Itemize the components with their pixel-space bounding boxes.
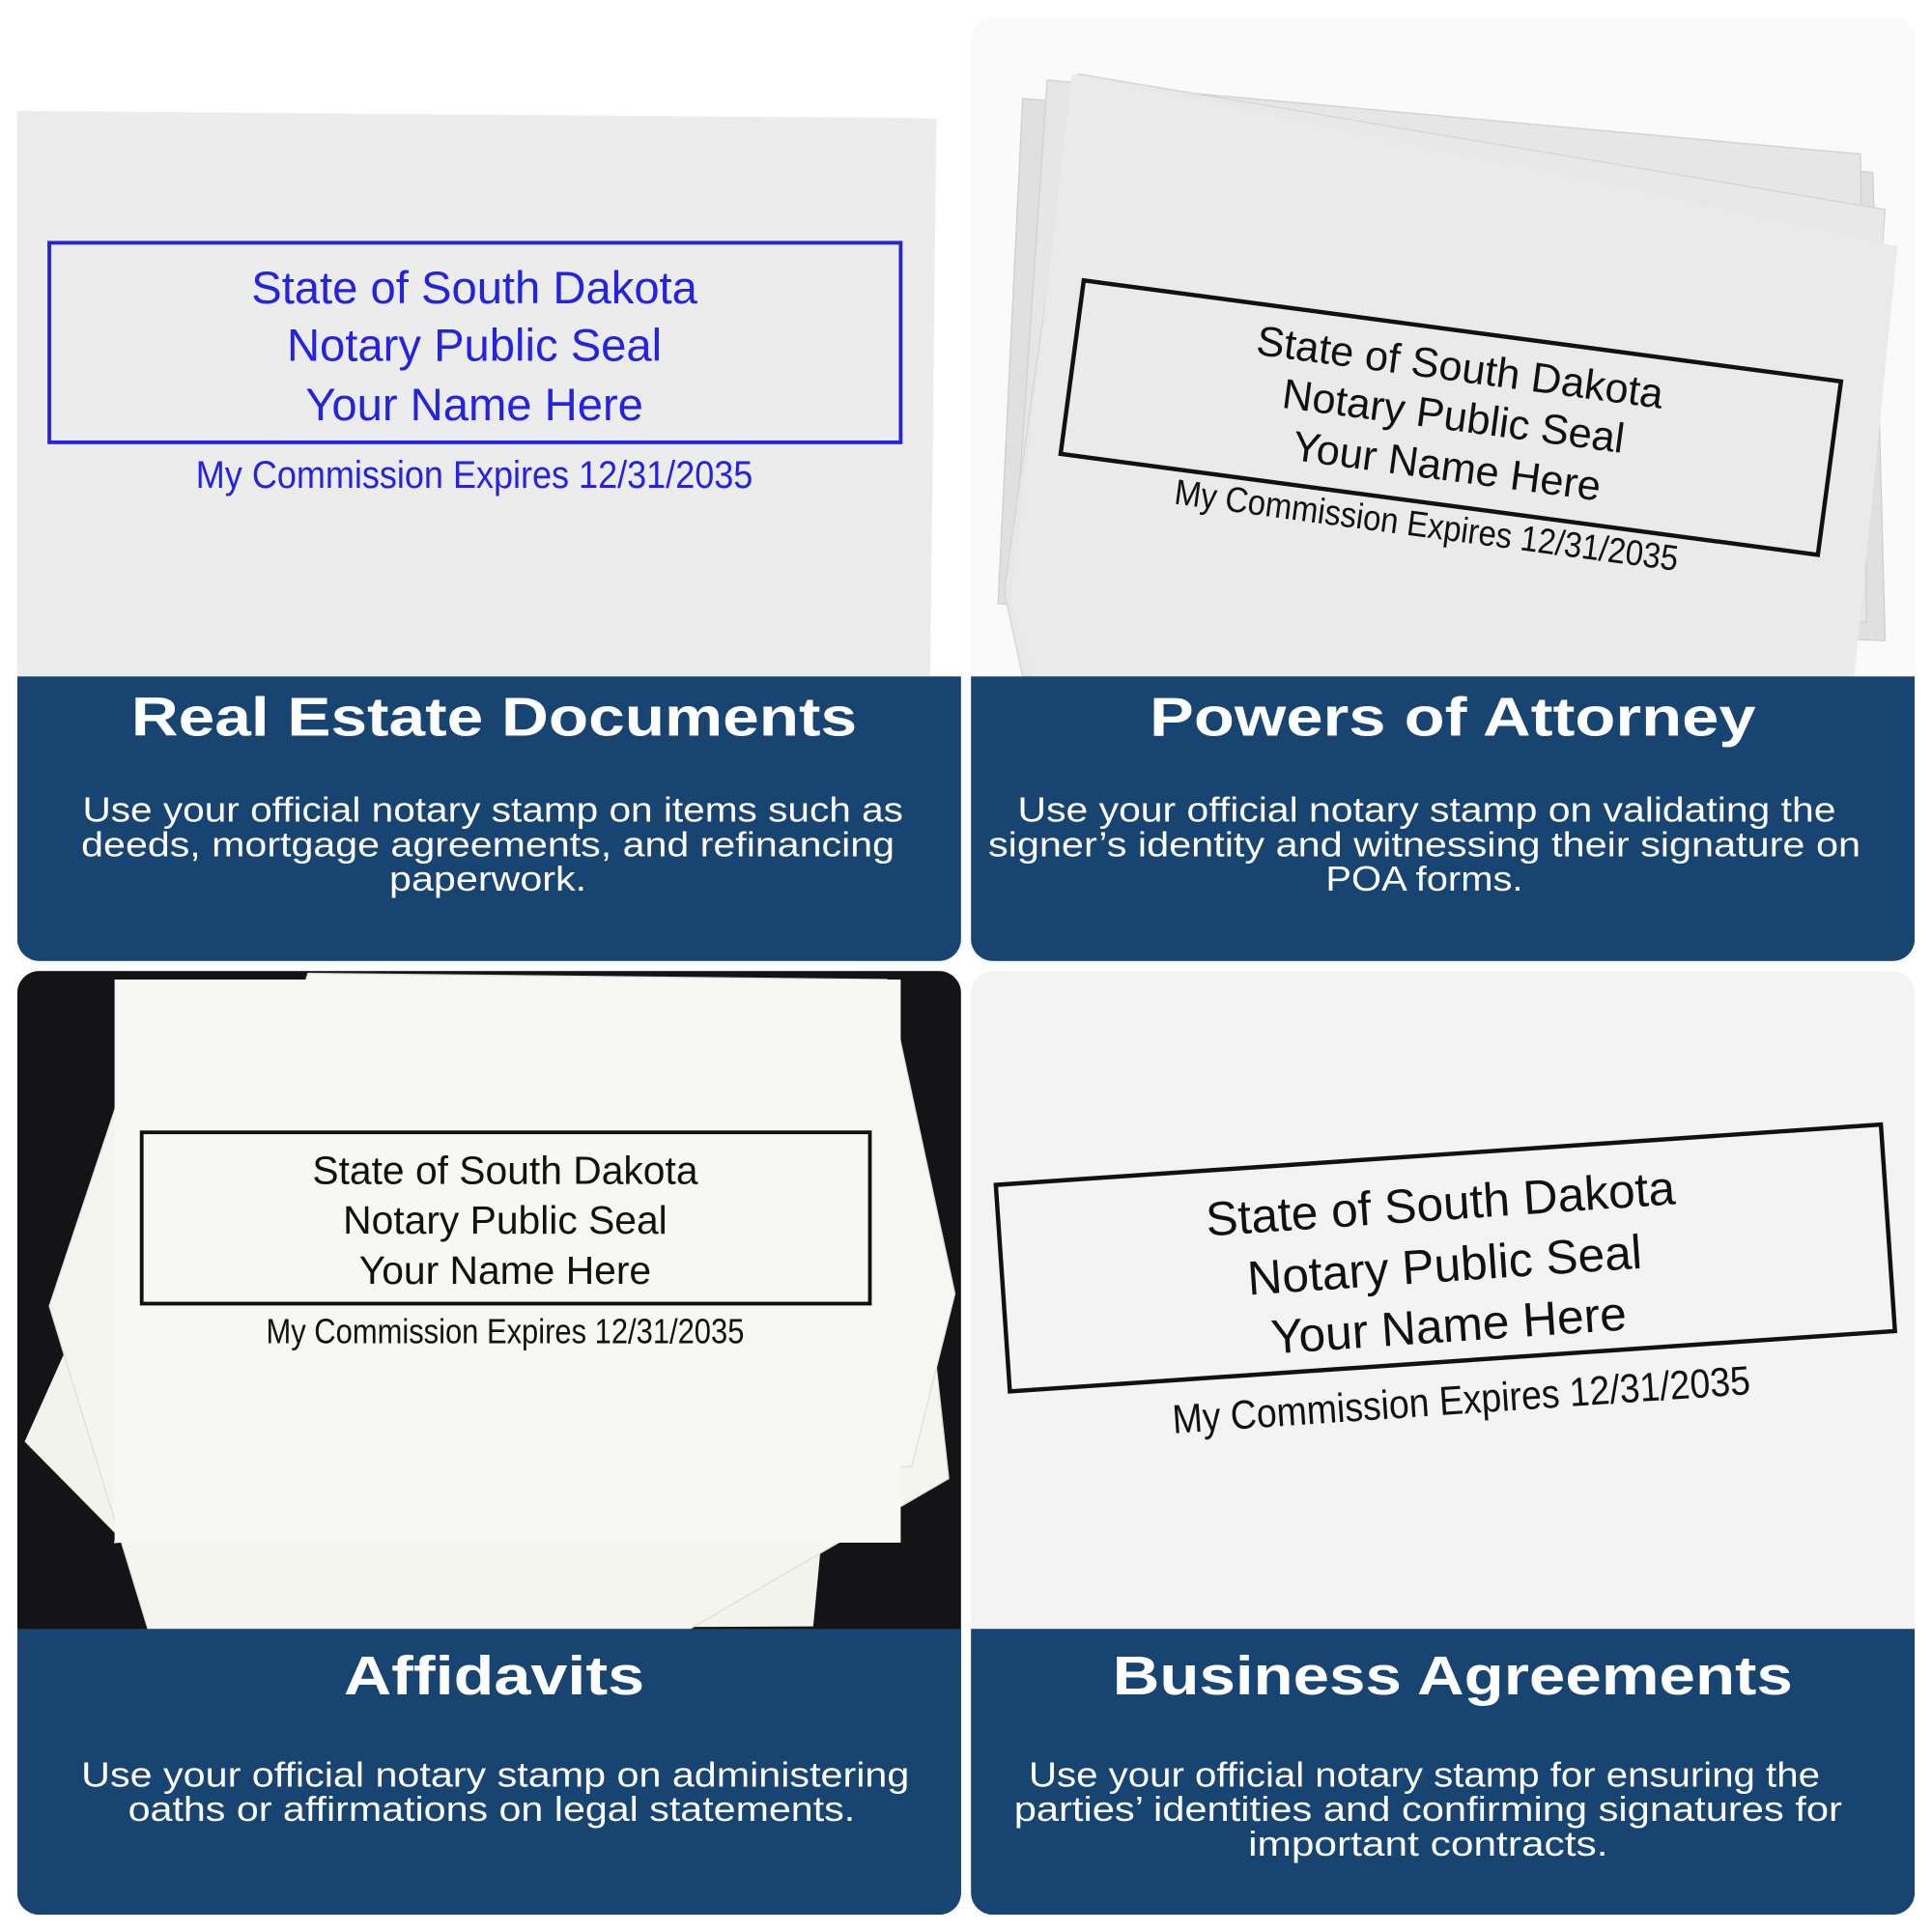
photo: stamped paper black: Your Name Here <box>1269 1286 1629 1364</box>
caption box: powers of attorney: Powers of Attorney <box>1150 686 1756 747</box>
caption box: real estate: paperwork. <box>389 860 586 898</box>
photo: stamped paper blue: Notary Public Seal <box>287 321 662 372</box>
photo: fanned papers: My Commission Expires 12/31/2035 <box>267 1312 744 1350</box>
photo: paper stack: My Commission Expires 12/31/2035 <box>1173 472 1681 579</box>
caption box: affidavits: oaths or affirmations on legal statements. <box>128 1790 855 1829</box>
photo: fanned papers: Your Name Here <box>359 1248 651 1293</box>
photo: paper stack: Your Name Here <box>1290 423 1604 510</box>
photo: stamped paper blue: My Commission Expires 12/31/2035 <box>196 454 753 497</box>
panel: real estate documents <box>17 17 961 961</box>
photo: fanned papers: State of South Dakota <box>312 1149 698 1193</box>
photo: paper stack: State of South Dakota <box>1254 318 1667 418</box>
caption box: powers of attorney: signer’s identity and witnessing their signature on <box>988 825 1861 864</box>
caption box: real estate <box>17 676 961 961</box>
photo: stamped paper blue: Your Name Here <box>305 380 643 431</box>
panel: powers of attorney <box>971 17 1915 961</box>
caption box: business agreements: important contracts. <box>1248 1825 1608 1863</box>
photo: stamped paper blue: State of South Dakota <box>251 263 698 314</box>
caption box: powers of attorney: Use your official notary stamp on validating the <box>1018 791 1836 830</box>
caption box: real estate: Use your official notary stamp on items such as <box>82 791 903 830</box>
caption box: powers of attorney: POA forms. <box>1325 860 1523 898</box>
caption box: powers of attorney <box>971 676 1915 961</box>
photo: paper stack: Notary Public Seal <box>1280 371 1628 463</box>
caption box: affidavits: Affidavits <box>344 1645 644 1706</box>
caption box: business agreements <box>971 1629 1915 1915</box>
photo: stamped paper black: State of South Dakota <box>1204 1160 1677 1246</box>
caption box: affidavits: Use your official notary stamp on administering <box>81 1755 909 1794</box>
panel: business agreements <box>971 971 1915 1915</box>
caption box: affidavits <box>17 1629 961 1915</box>
photo: fanned papers <box>25 974 955 1629</box>
caption box: business agreements: Business Agreements <box>1113 1645 1793 1706</box>
photo: stamped paper black: Notary Public Seal <box>1245 1225 1643 1305</box>
caption box: business agreements: parties’ identities and confirming signatures for <box>1014 1790 1842 1829</box>
photo: stamped paper black: My Commission Expires 12/31/2035 <box>1171 1357 1751 1442</box>
photo: fanned papers: Notary Public Seal <box>343 1198 668 1242</box>
caption box: real estate: deeds, mortgage agreements, and refinancing <box>81 825 895 864</box>
caption box: business agreements: Use your official notary stamp for ensuring the <box>1029 1755 1820 1794</box>
photo: stamped paper black <box>996 1124 1899 1453</box>
caption box: real estate: Real Estate Documents <box>131 686 857 747</box>
panel: affidavits <box>17 971 961 1915</box>
photo: stamped paper blue <box>17 111 936 676</box>
photo: paper stack <box>998 74 1897 676</box>
